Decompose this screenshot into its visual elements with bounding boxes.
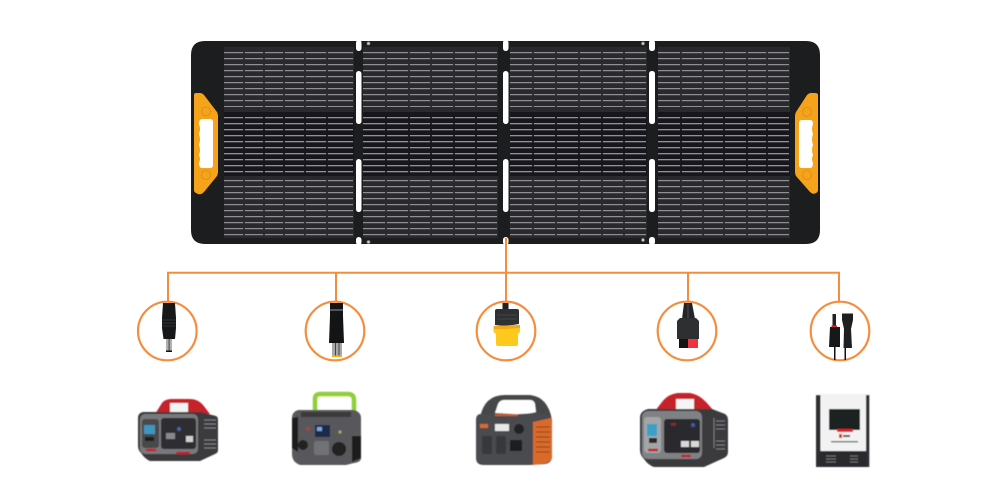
device 5: solar charge controller bbox=[816, 394, 870, 467]
connector 4: Anderson plug bbox=[658, 302, 716, 360]
fold slots bbox=[356, 40, 655, 245]
device 1: red power station bbox=[138, 399, 218, 461]
connector 5: MC4 pair bbox=[811, 302, 869, 360]
connector 1: DC barrel plug bbox=[138, 302, 197, 360]
device 2: green power station bbox=[292, 394, 361, 465]
right handle bbox=[795, 93, 818, 194]
solar panel bbox=[191, 40, 820, 245]
device 3: orange power station bbox=[476, 395, 552, 465]
eyelets bbox=[367, 42, 645, 244]
connector 3: XT60 bbox=[477, 302, 535, 360]
panel body bbox=[191, 41, 820, 244]
left handle bbox=[194, 93, 218, 194]
orange connection lines bbox=[168, 238, 839, 302]
solar cells bbox=[224, 47, 790, 238]
device 4: red power station large bbox=[640, 393, 728, 467]
connector 2: DC barrel plug with yellow tip bbox=[306, 302, 364, 360]
